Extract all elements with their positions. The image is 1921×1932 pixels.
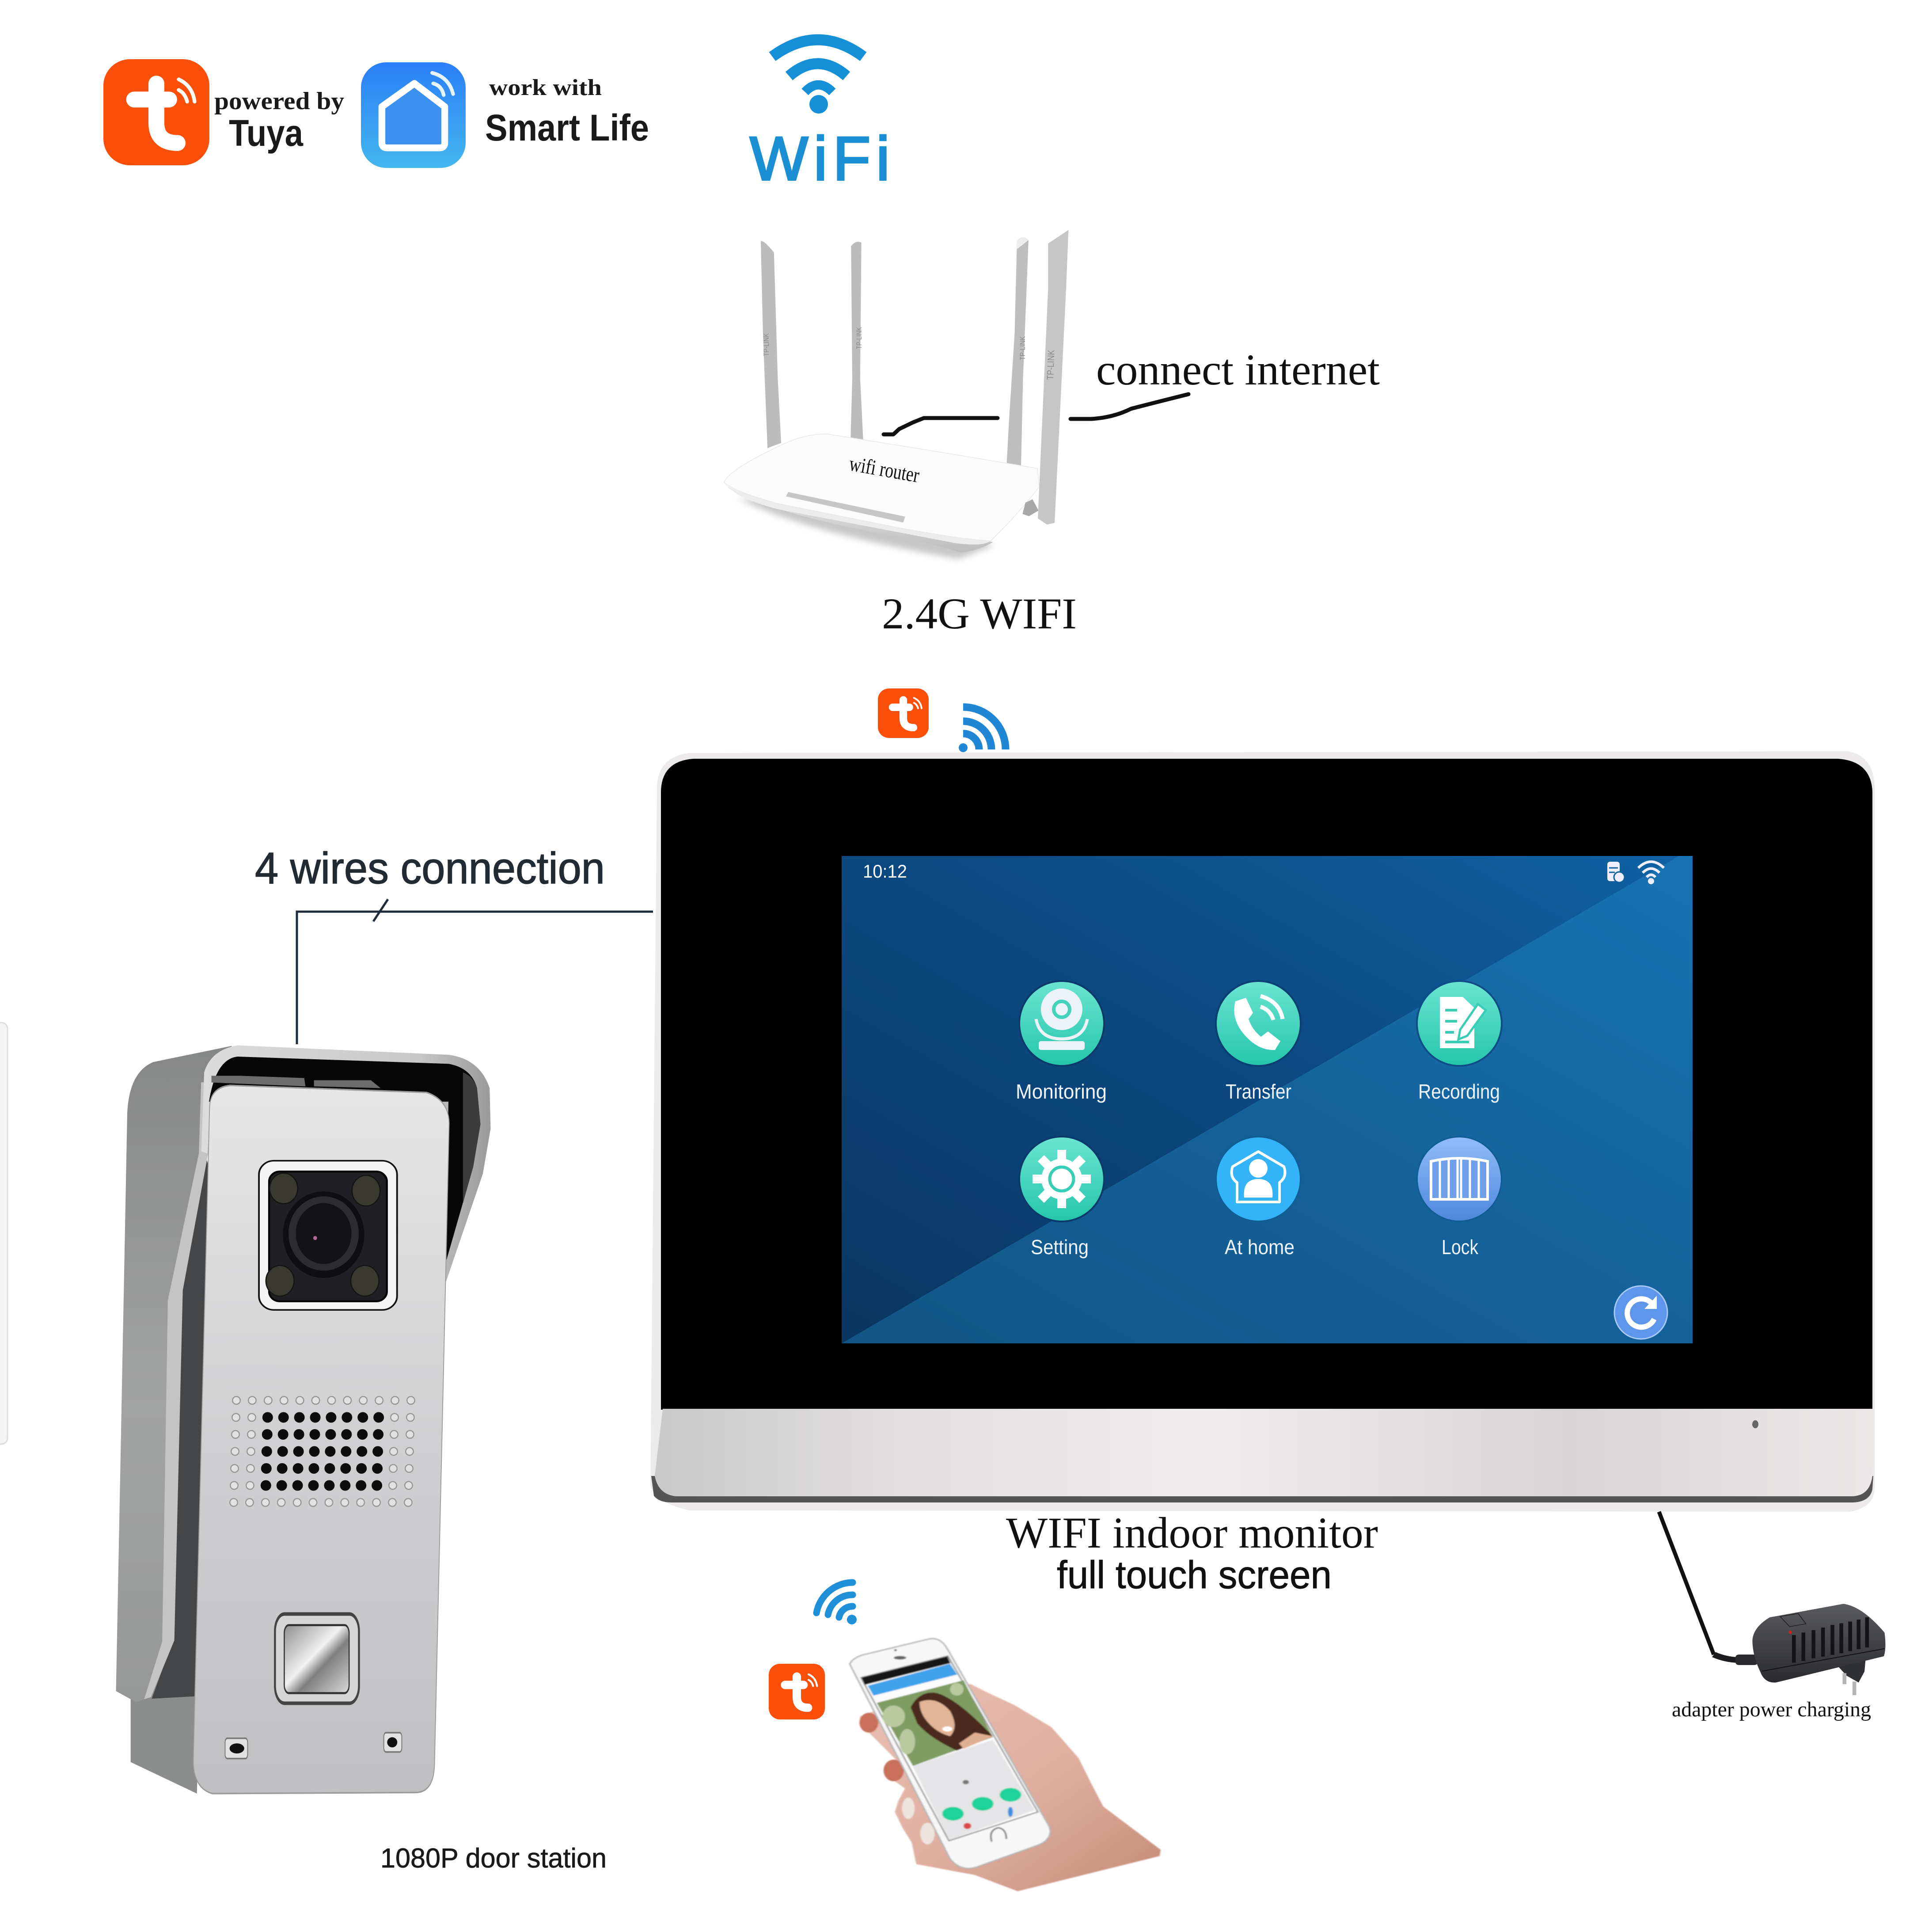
icon: refresh button: [1614, 1286, 1667, 1339]
lower side block: [131, 1280, 207, 1794]
monitor microphone: [1752, 1420, 1758, 1428]
call button frame: [275, 1614, 359, 1703]
grille ring centers: [234, 1400, 415, 1502]
icon: status wifi: [1638, 862, 1664, 883]
icon: Lock: [1416, 1136, 1502, 1222]
hair: [911, 1692, 993, 1751]
icon: Tuya logo: [103, 59, 209, 165]
earpiece: [894, 1649, 906, 1659]
lens glint: [313, 1236, 317, 1240]
camera frame: [259, 1161, 397, 1310]
internet cable: [1071, 394, 1188, 419]
icon: status storage: [1607, 862, 1625, 882]
face: [919, 1700, 954, 1736]
antenna labels: [762, 327, 1056, 380]
icon: wifi signal near phone: [816, 1582, 857, 1624]
icon: At home: [1215, 1136, 1301, 1222]
router drawing: [724, 230, 1068, 559]
app small markers: [963, 1780, 1013, 1829]
icon: Smart Life logo: [361, 62, 466, 168]
adapter cord: [1714, 1654, 1757, 1660]
adapter pins: [1845, 1673, 1854, 1695]
router lip: [724, 483, 991, 544]
lens glass: [296, 1203, 352, 1264]
grille dark holes: [266, 1418, 379, 1486]
camera module: [259, 1161, 397, 1310]
phone status bar: [862, 1657, 950, 1685]
hand: [860, 1684, 1161, 1891]
fingernails: [902, 1798, 935, 1845]
icon: Recording: [1416, 980, 1503, 1067]
chest: [959, 1733, 993, 1749]
icon: Tuya badge near phone: [769, 1664, 825, 1719]
phone body: [850, 1639, 1050, 1868]
antenna 4: [1038, 230, 1068, 525]
text: powered by: powered by: [214, 87, 344, 115]
call button: [284, 1625, 349, 1693]
smile: [942, 1727, 952, 1731]
camera window: [269, 1171, 387, 1301]
strain relief: [1735, 1654, 1758, 1665]
app buttons: [942, 1788, 1021, 1821]
app title bar: [868, 1664, 957, 1696]
door station: [116, 1046, 490, 1794]
door station hood: [201, 1046, 490, 1327]
hood top mechanism: [212, 1076, 380, 1088]
app call panel: [913, 1740, 1035, 1840]
icon: Tuya badge above monitor: [878, 688, 929, 738]
antenna 1: [761, 241, 781, 448]
text: clock: 10:12: [863, 861, 907, 882]
text: 2.4G WIFI: 2.4G WIFI: [882, 589, 1077, 638]
label antenna 4: TP-LINK: [1045, 350, 1056, 380]
adapter vents: [1794, 1617, 1867, 1663]
home button: [991, 1828, 1006, 1842]
lens ring: [289, 1196, 359, 1271]
label antenna 1: TP-LINK: [762, 333, 771, 356]
monitor silver frame: [650, 751, 1875, 1512]
text: Lock: Lock: [1442, 1236, 1479, 1259]
video photo: [877, 1680, 993, 1766]
antenna 3: [1007, 237, 1029, 465]
adapter label plate: [1780, 1613, 1806, 1627]
screen background: [842, 856, 1693, 1343]
text: work with: work with: [489, 75, 602, 100]
text: Transfer: Transfer: [1226, 1080, 1291, 1103]
icon: WiFi logo: [750, 40, 890, 193]
text: Recording: Recording: [1418, 1080, 1500, 1103]
icon: Monitoring: [1018, 980, 1105, 1067]
text: 4 wires connection: 4 wires connection: [255, 844, 605, 893]
icon: wifi signal above monitor: [959, 707, 1006, 752]
router base: [736, 494, 993, 553]
hood interior: [209, 1057, 480, 1262]
edge tab artifact: [0, 1023, 8, 1444]
text: Smart Life: Smart Life: [485, 107, 649, 148]
text: Monitoring: Monitoring: [1016, 1080, 1107, 1103]
wifi wordmark: WiFi: [750, 124, 890, 193]
icon: Setting: [1018, 1136, 1105, 1222]
adapter body: [1752, 1604, 1885, 1682]
indoor monitor: [650, 751, 1875, 1512]
adapter plug: [1838, 1660, 1865, 1682]
icon: Transfer: [1215, 980, 1302, 1067]
monitor black bezel: [661, 759, 1872, 1410]
side shell: [116, 1046, 232, 1702]
door station lower body: [116, 1046, 232, 1794]
grille ring outlines: [234, 1400, 415, 1502]
monitor brushed metal strip: [655, 1409, 1873, 1496]
text: 1080P door station: 1080P door station: [380, 1843, 607, 1874]
text: adapter power charging: adapter power charging: [1672, 1698, 1871, 1721]
text: wifi router: wifi router: [847, 452, 921, 487]
screen diagonal panel: [842, 856, 1693, 1343]
hood inner wall: [463, 1072, 480, 1203]
adapter seam: [1762, 1649, 1884, 1671]
text: WIFI indoor monitor: WIFI indoor monitor: [1006, 1508, 1378, 1557]
adapter LED: [1788, 1631, 1792, 1634]
text: Tuya: Tuya: [229, 112, 304, 154]
antenna 2: [850, 242, 863, 441]
dark recess: [152, 1143, 209, 1699]
silver strap: [144, 1082, 209, 1699]
door station face: [193, 1085, 449, 1794]
camera LEDs: [266, 1173, 380, 1296]
router LED slot: [786, 492, 905, 522]
phone screen: [861, 1656, 1038, 1841]
router top: [724, 434, 1039, 541]
phone in hand: [850, 1639, 1161, 1891]
power cable: [1659, 1512, 1714, 1654]
wifi router: [724, 230, 1068, 559]
text: connect internet: connect internet: [1096, 345, 1380, 394]
monitor screen: [842, 856, 1693, 1343]
antenna 3 tip: [1017, 237, 1029, 249]
right screw hole: [384, 1733, 402, 1752]
camera lens: [283, 1191, 364, 1278]
face plate: [193, 1085, 449, 1794]
fingertips: [859, 1713, 904, 1781]
text: full touch screen: full touch screen: [1057, 1553, 1332, 1597]
router port stub: [1022, 499, 1039, 516]
text: At home: At home: [1225, 1236, 1295, 1259]
router cable: [884, 418, 998, 434]
photo highlights: [882, 1683, 964, 1754]
adapter: [1714, 1604, 1885, 1695]
wire: door station to monitor: [297, 899, 653, 1044]
monitor bottom shadow: [651, 1476, 1873, 1502]
left screw hole: [225, 1738, 247, 1759]
label antenna 2: TP-LINK: [855, 327, 863, 349]
hood rim: [201, 1046, 490, 1327]
label antenna 3: TP-LINK: [1018, 336, 1027, 360]
speaker grille: [234, 1400, 415, 1502]
text: Setting: Setting: [1031, 1236, 1089, 1259]
router shadow: [738, 498, 994, 559]
wifi arcs: [772, 40, 863, 114]
